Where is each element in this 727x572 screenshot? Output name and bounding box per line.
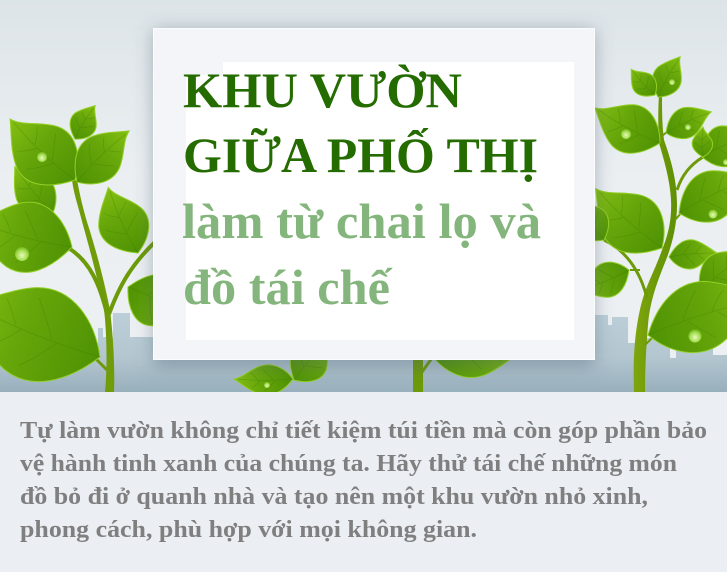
- intro panel background: [0, 392, 727, 572]
- subtitle heading: làm từ chai lọ và: [182, 193, 541, 249]
- title heading: GIỮA PHỐ THỊ: [183, 126, 538, 183]
- title heading: KHU VƯỜN: [183, 62, 462, 118]
- title heading: [183, 62, 538, 183]
- left plant: [0, 98, 203, 403]
- intro paragraph: [20, 418, 707, 543]
- intro paragraph: vệ hành tinh xanh của chúng ta. Hãy thử tái chế những món: [20, 451, 677, 477]
- subtitle heading: đồ tái chế: [183, 259, 393, 315]
- title panel: [153, 28, 595, 366]
- background sky: [0, 0, 727, 392]
- intro paragraph: đồ bỏ đi ở quanh nhà và tạo nên một khu vườn nhỏ xinh,: [20, 484, 648, 510]
- bottom leaves behind panel: [234, 319, 530, 395]
- city skyline: [0, 313, 727, 392]
- right plant: [559, 49, 727, 392]
- subtitle heading: [182, 193, 541, 315]
- intro paragraph: phong cách, phù hợp với mọi không gian.: [20, 517, 477, 543]
- intro paragraph: Tự làm vườn không chỉ tiết kiệm túi tiền mà còn góp phần bảo: [20, 418, 707, 444]
